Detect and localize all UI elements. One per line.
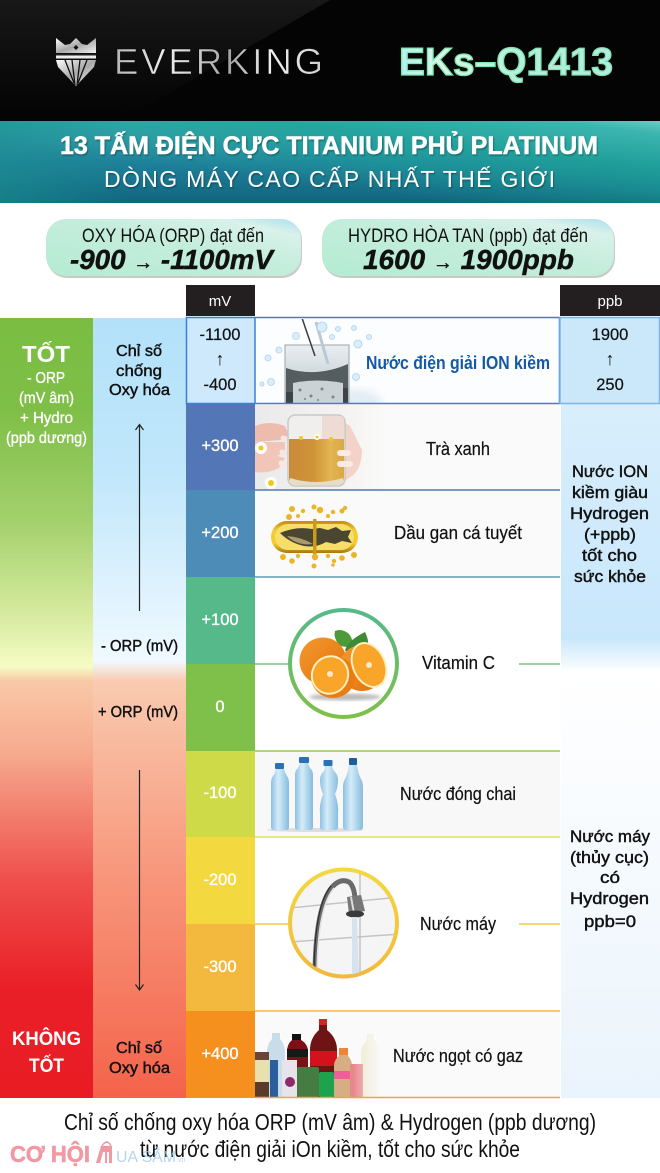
column header: mV: [186, 285, 255, 316]
row: bottled water: [267, 757, 516, 832]
footer caption: [64, 1109, 596, 1162]
row: cod liver oil: [271, 504, 522, 568]
label: good: (mV âm): [19, 390, 74, 407]
title line 1: 13 TẤM ĐIỆN CỰC TITANIUM PHỦ PLATINUM: [60, 130, 598, 160]
panel: ppb column: [561, 404, 660, 1098]
connector: [255, 663, 560, 665]
brand name: EVERKING: [114, 41, 323, 82]
icon: faucet in ring: [290, 870, 400, 980]
pill: ORP: [46, 219, 302, 278]
label: good: TỐT: [22, 340, 70, 367]
label: oxidation index: [109, 1040, 170, 1077]
icon: water glass: [260, 319, 382, 403]
label: good: + Hydro: [20, 410, 73, 427]
ppb note: tap water: Hydrogen: [570, 889, 649, 908]
label: antioxidant index: Chỉ số: [116, 343, 162, 360]
row: tap water: [255, 870, 560, 980]
icon: Everking crown logo: [56, 38, 96, 86]
label: good: - ORP: [27, 370, 65, 387]
highlight outline for top row: [186, 318, 660, 404]
ppb range box: 250: [596, 376, 624, 394]
ppb range box: ↑: [606, 349, 614, 369]
watermark: [10, 1140, 185, 1167]
panel: oxidation index: [93, 318, 186, 1098]
arrow: down: [136, 770, 144, 990]
pill: ORP: -900 → -1100mV: [70, 244, 275, 275]
label: Dầu gan cá tuyết: [394, 523, 522, 543]
label: oxidation index: Oxy hóa: [109, 1060, 170, 1077]
title line 2: DÒNG MÁY CAO CẤP NHẤT THẾ GIỚI: [104, 165, 555, 192]
icon: glass of tea: [255, 405, 362, 489]
ppb note: tap water: (thủy cục): [570, 848, 649, 867]
label: good: [6, 340, 87, 447]
mV scale cells: +200: [201, 524, 239, 542]
label: not good: [12, 1028, 81, 1077]
ppb note: ionized water: [570, 462, 649, 586]
ppb note: tap water: ppb=0: [584, 912, 636, 931]
label: good: (ppb dương): [6, 430, 87, 447]
ppb note: tap water: Nước máy: [570, 827, 650, 846]
label: not good: KHÔNG: [12, 1028, 81, 1050]
arrow: up: [136, 424, 144, 611]
ppb range box: 1900: [592, 326, 628, 344]
label: Nước đóng chai: [400, 784, 516, 804]
mV scale cells: -200: [203, 871, 237, 889]
row: green tea: [255, 405, 490, 489]
watermark: CƠ HỘI: [10, 1140, 90, 1167]
ppb note: tap water: có: [600, 868, 620, 887]
icon: soft drink bottles: [255, 1019, 378, 1097]
mV scale cells: -100: [203, 784, 237, 802]
mV scale cells: -300: [203, 958, 237, 976]
row: ionized water: [260, 319, 550, 403]
column header: mV: mV: [209, 293, 231, 310]
ppb note: tap water: [570, 827, 650, 931]
label: negative ORP: - ORP (mV): [101, 638, 178, 655]
mV scale cells: +300: [201, 437, 239, 455]
ppb note: ionized water: tốt cho: [582, 546, 637, 565]
row divider lines: [255, 404, 560, 1098]
row: soft drinks: [255, 1012, 523, 1097]
mV scale cells: [186, 318, 255, 1098]
label: antioxidant index: [109, 343, 170, 399]
label: Vitamin C: [422, 653, 495, 673]
watermark: .vn: [176, 1157, 185, 1164]
mV range -1100 to -400: -1100: [200, 326, 240, 344]
column header: ppb: ppb: [597, 293, 623, 310]
label: Nước điện giải ION kiềm: [366, 352, 550, 373]
icon: oranges in ring: [290, 610, 397, 717]
ppb note: ionized water: sức khỏe: [574, 567, 646, 586]
ppb note: ionized water: kiềm giàu: [572, 483, 648, 502]
footer caption: từ nước điện giải iOn kiềm, tốt cho sức khỏe: [140, 1136, 520, 1162]
connector: [255, 923, 560, 925]
mV scale cells: +400: [201, 1045, 239, 1063]
label: antioxidant index: chống: [116, 363, 162, 380]
label: Trà xanh: [426, 439, 490, 459]
row: vitamin C: [255, 610, 560, 717]
column header: ppb: [560, 285, 660, 316]
mV scale cells: 0: [215, 698, 225, 716]
mV range -1100 to -400: [200, 326, 240, 394]
header band: [0, 0, 660, 121]
mV range -1100 to -400: -400: [203, 376, 237, 394]
panel: good / bad scale: [0, 318, 93, 1098]
pill: ORP: OXY HÓA (ORP) đạt đến: [82, 225, 264, 247]
icon: fish oil capsule: [271, 504, 358, 568]
model name: EKs–Q1413: [399, 41, 613, 84]
label: Nước máy: [420, 914, 496, 934]
ppb note: ionized water: Hydrogen: [570, 504, 649, 523]
watermark: UA SẮM: [116, 1147, 176, 1166]
ppb range box: [560, 318, 660, 404]
icon: water bottles: [267, 757, 363, 832]
mV range -1100 to -400: ↑: [216, 349, 224, 369]
label: positive ORP: + ORP (mV): [98, 704, 178, 721]
pill: Hydrogen: [322, 219, 615, 278]
label: oxidation index: Chỉ số: [116, 1040, 162, 1057]
label: antioxidant index: Oxy hóa: [109, 382, 170, 399]
label: Nước ngọt có gaz: [393, 1046, 523, 1066]
pill: Hydrogen: HYDRO HÒA TAN (ppb) đạt đến: [348, 225, 588, 247]
ppb note: ionized water: Nước ION: [572, 462, 648, 481]
row backgrounds: [255, 404, 560, 1098]
pill: Hydrogen: 1600 → 1900ppb: [363, 244, 574, 275]
ppb note: ionized water: (+ppb): [584, 525, 636, 544]
mV scale cells: +100: [201, 611, 239, 629]
label: not good: TỐT: [29, 1055, 64, 1077]
title banner: [0, 121, 660, 203]
